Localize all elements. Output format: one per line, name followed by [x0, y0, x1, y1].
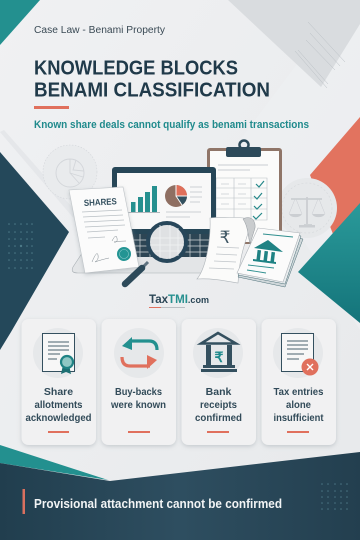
label — [274, 386, 324, 424]
document heading: SHARES — [84, 196, 117, 208]
label: were known — [110, 399, 166, 411]
illustration: shares document — [69, 187, 139, 273]
label: Share — [44, 386, 73, 398]
hatch lines: top right — [295, 22, 345, 88]
title: KNOWLEDGE BLOCKS — [34, 56, 238, 80]
laptop screen — [112, 167, 216, 234]
card: buy-backs — [102, 319, 176, 445]
logo: TaxTMI.com: TaxTMI.com — [149, 294, 209, 306]
footer text: Provisional attachment cannot be confirmed — [34, 497, 282, 511]
label — [26, 386, 92, 424]
illustration: rupee receipt — [197, 217, 255, 283]
pie chart on screen — [165, 185, 187, 207]
subtitle: Known share deals cannot qualify as benami transactions — [34, 119, 309, 131]
label: Bank — [206, 386, 231, 398]
label: allotments — [34, 399, 83, 411]
illustration: bank document stack — [237, 228, 303, 287]
label: receipts — [200, 399, 237, 411]
icon: document with cross — [273, 328, 323, 378]
label — [195, 386, 242, 424]
footer accent bar — [22, 489, 25, 514]
icon: bank with rupee: ₹ — [215, 349, 224, 365]
illustration: magnifying glass — [125, 223, 186, 284]
icon: certificate — [33, 328, 83, 378]
background shape: teal diamond — [298, 203, 360, 323]
label: Buy-backs — [115, 386, 162, 398]
label: alone — [286, 399, 311, 411]
header text — [34, 25, 309, 131]
bar chart on screen — [131, 186, 157, 212]
icon: exchange arrows — [114, 328, 164, 378]
teal seal — [117, 247, 131, 261]
footer band — [0, 452, 360, 540]
background shape: top-left teal triangle — [0, 0, 40, 45]
title: BENAMI CLASSIFICATION — [34, 78, 270, 102]
icon: faded pie chart circle — [43, 145, 97, 199]
label: insufficient — [274, 412, 324, 424]
title accent bar — [34, 106, 69, 109]
laptop keyboard — [108, 233, 214, 258]
background shape: coral wedge — [310, 117, 360, 234]
label: acknowledged — [26, 412, 92, 424]
card: tax entries — [262, 319, 336, 445]
background shape: top-right grey diamond — [228, 0, 360, 87]
card: share allotments — [22, 319, 96, 445]
rupee symbol: ₹ — [220, 228, 230, 247]
laptop base — [72, 244, 226, 273]
dot grid: left diamond — [8, 223, 33, 269]
bank icon — [253, 240, 283, 264]
dot grid: footer — [321, 483, 348, 510]
label: confirmed — [195, 412, 242, 424]
background shape: left navy diamond — [0, 152, 69, 350]
illustration: laptop — [72, 167, 226, 273]
label — [110, 386, 166, 411]
icon: faded scales circle — [277, 178, 337, 238]
illustration: clipboard with checklist — [207, 140, 282, 244]
footer teal accent — [0, 445, 108, 480]
label: Tax entries — [274, 386, 324, 398]
card: bank receipts — [182, 319, 256, 445]
breadcrumb: Case Law - Benami Property — [34, 25, 165, 36]
title — [34, 56, 270, 102]
